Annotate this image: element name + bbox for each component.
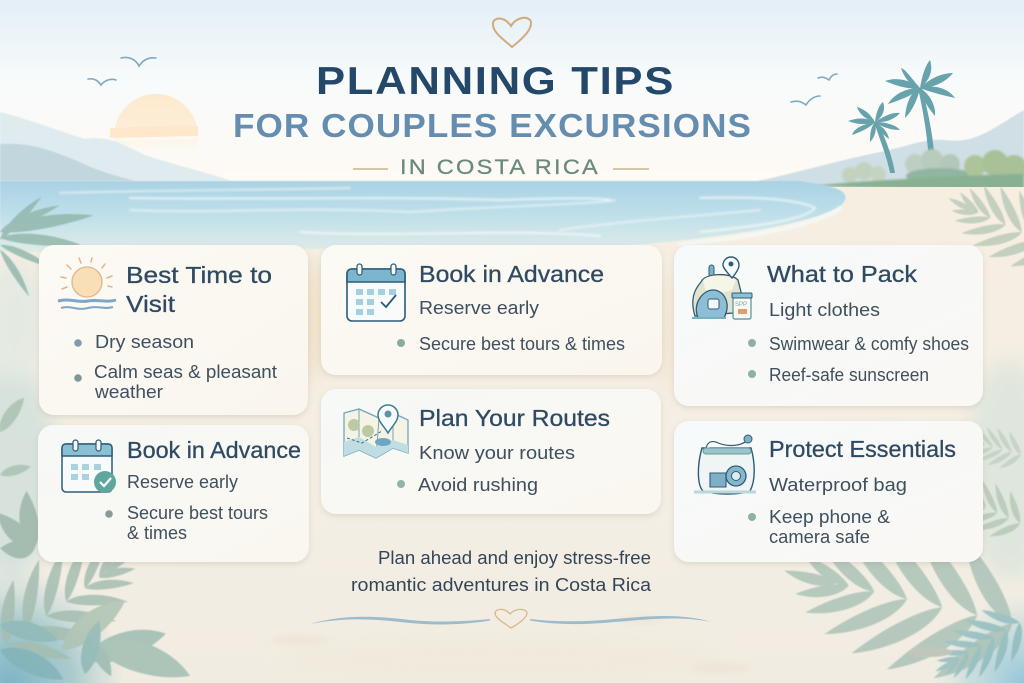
- text: Know your routes: [419, 443, 575, 463]
- panel: book in advance left: [38, 425, 309, 562]
- bullet list: [748, 334, 969, 385]
- sky: [0, 0, 1024, 182]
- bullet item: [748, 507, 890, 547]
- subheading rules: [353, 168, 649, 170]
- panel: protect essentials: [674, 421, 983, 562]
- palm leaves top left: [0, 193, 94, 298]
- text: Light clothes: [769, 300, 880, 320]
- heading: planning tips: PLANNING TIPS: [316, 60, 675, 103]
- footer message: romantic adventures in Costa Rica: [351, 575, 652, 595]
- foliage bottom left: [0, 393, 195, 683]
- heading line 2: Visit: [126, 291, 176, 317]
- heading: Book in Advance: [419, 261, 604, 287]
- icon: waterproof bag with camera: [694, 435, 756, 494]
- icon: heart top: [493, 18, 531, 47]
- bullet item: [105, 503, 268, 543]
- palm trees: [848, 60, 955, 173]
- bullet list: Calm seas & pleasant: [94, 362, 277, 382]
- bullet item: Secure best tours: [127, 503, 268, 523]
- panel: what to pack: [674, 245, 983, 406]
- heading: Best Time to: [126, 262, 272, 288]
- palm short: [848, 102, 900, 173]
- mountains left: [0, 112, 232, 181]
- bullet item: Secure best tours & times: [419, 334, 625, 354]
- birds: [88, 57, 837, 105]
- footer message: Plan ahead and enjoy stress-free: [378, 548, 651, 568]
- heading: Book in Advance: [127, 437, 301, 463]
- palm leaves top right: [948, 186, 1024, 267]
- bullet item: camera safe: [769, 527, 870, 547]
- foliage bottom right: [784, 428, 1022, 679]
- text: Reserve early: [419, 298, 539, 318]
- text: Waterproof bag: [769, 475, 907, 495]
- corner tint left: [0, 568, 125, 683]
- icon: sun over waves: [58, 258, 116, 309]
- bullet item: Keep phone &: [769, 507, 890, 527]
- bullet list: Reef-safe sunscreen: [769, 365, 929, 385]
- panel: best time to visit: [39, 245, 308, 415]
- footer divider with heart: [310, 609, 712, 628]
- sea: [0, 181, 846, 252]
- panel: plan your routes: [321, 389, 661, 514]
- palm tall: [885, 60, 955, 172]
- bullet list: weather: [94, 382, 163, 402]
- subheading: in costa rica: IN COSTA RICA: [400, 156, 600, 179]
- sand: [0, 187, 1024, 683]
- footer message: [351, 548, 652, 595]
- icon: folded map with pin: [344, 405, 408, 458]
- sand shading: [0, 260, 1024, 680]
- heading: for couples excursions: FOR COUPLES EXCURSIONS: [233, 107, 752, 144]
- bullet list: Dry season: [95, 332, 194, 352]
- hills right: [758, 110, 1024, 190]
- heading: Plan Your Routes: [419, 405, 610, 431]
- title block: [233, 18, 752, 179]
- bullet item: Avoid rushing: [418, 475, 538, 495]
- sun: [110, 94, 198, 155]
- bullet list: [74, 332, 277, 402]
- bushes: [812, 149, 1024, 190]
- heading: What to Pack: [767, 261, 918, 287]
- bullet item: & times: [127, 523, 187, 543]
- wave crests: [60, 188, 840, 244]
- text: Reserve early: [127, 472, 238, 492]
- icon: calendar with checkmark: [347, 264, 405, 321]
- panel: book in advance center: [321, 245, 662, 375]
- heading: Protect Essentials: [769, 436, 956, 462]
- icon: backpack and sunscreen: SPP: [735, 302, 747, 308]
- corner tint right: [934, 593, 1024, 683]
- icon: backpack and sunscreen: [692, 257, 752, 319]
- icon: calendar with check badge: [62, 440, 116, 493]
- bullet list: Swimwear & comfy shoes: [769, 334, 969, 354]
